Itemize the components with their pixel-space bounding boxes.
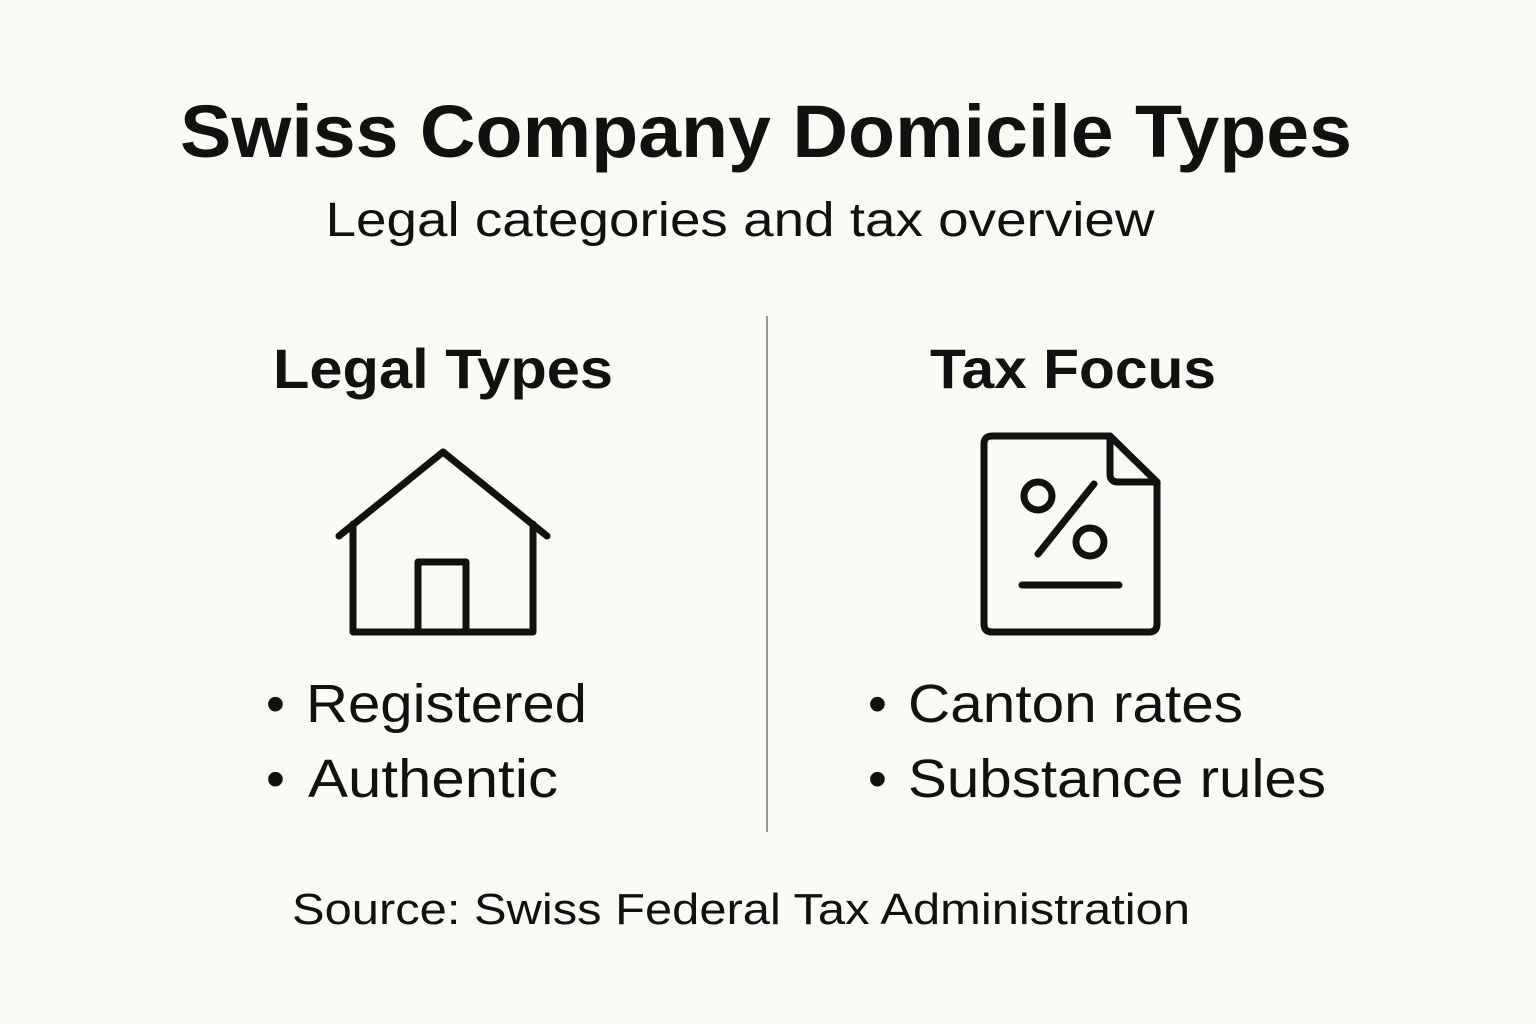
heading: legal types: Legal Types xyxy=(273,337,613,400)
bullet list: legal types: Registered xyxy=(306,674,587,734)
icon: house xyxy=(339,452,547,632)
bullet list: legal types: Authentic xyxy=(308,749,558,809)
bullet list: legal types: • xyxy=(266,674,285,734)
bullet list: tax focus: • xyxy=(868,749,887,809)
heading: tax focus: Tax Focus xyxy=(930,337,1216,400)
bullet list: legal types: • xyxy=(266,749,285,809)
source note: Source: Swiss Federal Tax Administration xyxy=(292,885,1190,934)
bullet list: tax focus: Canton rates xyxy=(908,674,1243,734)
bullet list: legal types xyxy=(266,674,587,809)
bullet list: tax focus: • xyxy=(868,674,887,734)
panel: tax focus xyxy=(868,337,1326,809)
title: Swiss Company Domicile Types xyxy=(180,90,1352,173)
panel: legal types xyxy=(266,337,613,809)
icon: tax document xyxy=(984,436,1157,632)
bullet list: tax focus xyxy=(868,674,1326,809)
subtitle: Legal categories and tax overview xyxy=(326,194,1155,247)
bullet list: tax focus: Substance rules xyxy=(908,749,1326,809)
